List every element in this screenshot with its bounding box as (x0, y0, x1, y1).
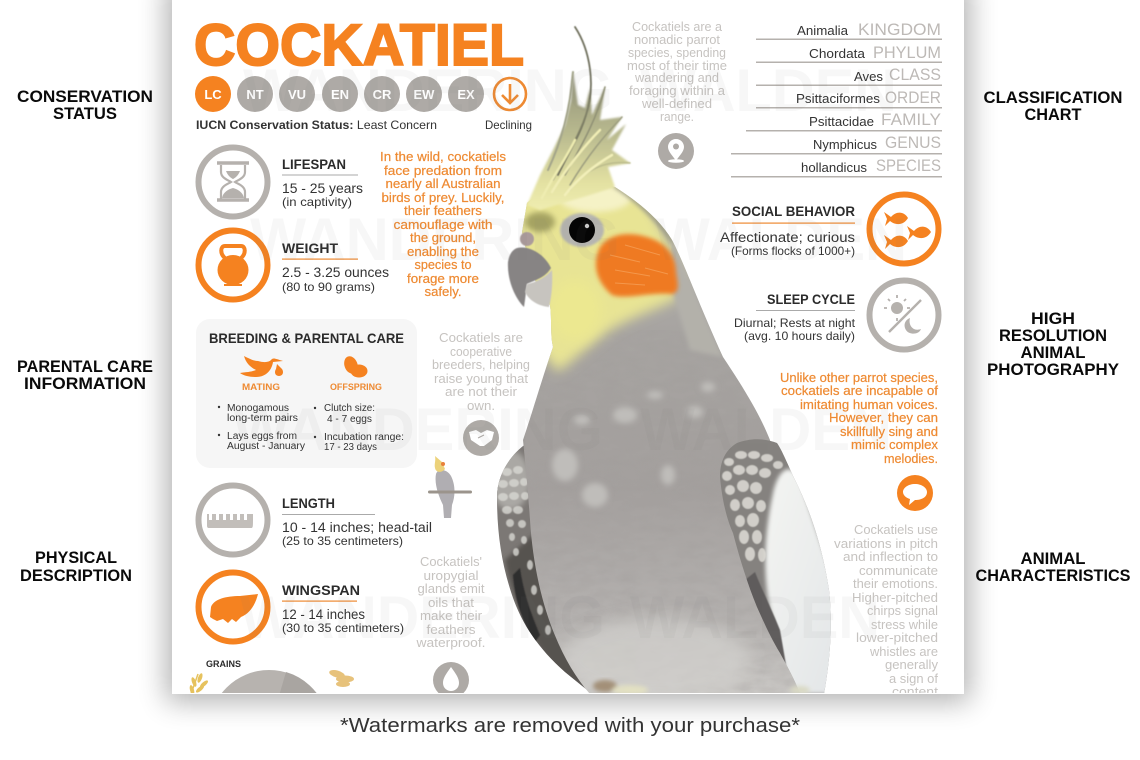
preening fact: uropygial (424, 569, 478, 583)
predation fact: forage more (407, 272, 479, 286)
mating bullets: August - January (227, 441, 305, 452)
weight block: WEIGHT (282, 241, 339, 256)
wingspan block: 12 - 14 inches (282, 607, 365, 622)
weight block: (80 to 90 grams) (282, 280, 375, 294)
vocal communication fact: lower-pitched (856, 631, 938, 645)
watermarks: WALDEN (640, 57, 897, 124)
side label: physical description: DESCRIPTION (20, 567, 132, 585)
predation fact: species to (414, 258, 472, 272)
side label: high resolution animal photography (987, 310, 1119, 379)
lifespan block (198, 148, 363, 216)
conservation status badges: LC (204, 87, 222, 102)
pale crown (559, 184, 631, 212)
vocal communication fact: generally (885, 658, 939, 672)
poster card (172, 0, 964, 694)
side label: parental care information: PARENTAL CARE (17, 358, 153, 376)
watermarks: WANDERING (250, 206, 620, 273)
predation fact: their feathers (404, 204, 482, 218)
icon: hourglass (198, 148, 268, 216)
conservation status badges (195, 76, 484, 112)
sleep cycle block: (avg. 10 hours daily) (744, 329, 855, 343)
panel: breeding and parental care: OFFSPRING (330, 382, 382, 392)
side label: high resolution animal photography: HIGH (1031, 310, 1075, 328)
panel: breeding and parental care (196, 319, 417, 468)
sleep cycle block: SLEEP CYCLE (767, 292, 855, 307)
watermarks: WALDEN (655, 206, 907, 273)
olive lores (525, 212, 555, 232)
card shadow (166, 0, 970, 702)
side label: parental care information: INFORMATION (24, 375, 146, 393)
weight block (198, 230, 389, 300)
conservation status badges: NT (246, 87, 264, 102)
side label: high resolution animal photography: RESOLUTION (999, 327, 1107, 345)
pale face wash (549, 280, 601, 340)
vocal communication fact: whistles are (869, 645, 938, 659)
side label: conservation status: CONSERVATION (17, 88, 153, 106)
social behavior block: SOCIAL BEHAVIOR (732, 204, 855, 219)
cooperative breeders fact: raise young that (434, 372, 529, 386)
icon: fish school (870, 194, 938, 264)
icon: map pin (658, 133, 694, 169)
eye (560, 213, 604, 247)
vocal communication fact: a sign of (889, 672, 939, 686)
pie chart (222, 670, 316, 693)
neck edge grey (672, 240, 723, 357)
crown edge shading (615, 185, 674, 243)
parrot photograph (490, 27, 840, 702)
crest (527, 72, 630, 210)
mating bullets: Lays eggs from (227, 431, 297, 442)
length block: 10 - 14 inches; head-tail (282, 520, 432, 535)
wingspan block: (30 to 35 centimeters) (282, 621, 404, 635)
right wing dark quill (745, 572, 786, 665)
side label: conservation status: STATUS (53, 105, 117, 123)
vocal communication fact: variations in pitch (834, 537, 938, 551)
classification chart: FAMILY (881, 110, 941, 129)
nomadic fact: well-defined (641, 97, 712, 111)
social behavior block (720, 194, 938, 264)
length block (198, 486, 432, 554)
watermarks: WALDEN (630, 584, 880, 651)
icon: eggs (344, 356, 368, 378)
offspring bullets (314, 403, 404, 453)
offspring bullets: Incubation range: (324, 432, 404, 443)
conservation status badges: EN (331, 87, 349, 102)
side label: parental care information (17, 358, 153, 393)
diet chart (190, 660, 354, 693)
preening fact (415, 555, 486, 650)
right wing scallops (722, 451, 783, 562)
watermarks (233, 57, 907, 651)
icon: small bird on perch (428, 456, 472, 518)
icon: wheat (190, 673, 208, 693)
vocal communication fact: stress while (871, 618, 938, 632)
icon: stork (240, 356, 283, 377)
classification chart: Psittaciformes (796, 91, 881, 106)
classification chart: Animalia (797, 23, 849, 38)
preening fact: feathers (426, 623, 476, 637)
icon: speech bubble (897, 475, 933, 511)
icon: kettlebell (198, 230, 268, 300)
feather texture (738, 670, 792, 690)
right wing white panel (765, 469, 840, 694)
mating bullets: long-term pairs (227, 413, 298, 424)
side label: animal characteristics: CHARACTERISTICS (976, 567, 1130, 585)
side label: animal characteristics (976, 550, 1130, 585)
voice mimicry fact: skillfully sing and (840, 425, 938, 439)
predation fact (380, 150, 506, 299)
vocal communication fact: Higher-pitched (852, 591, 938, 605)
nomadic fact (627, 20, 727, 124)
cooperative breeders fact: cooperative (450, 345, 512, 359)
side label: high resolution animal photography: PHOTOGRAPHY (987, 361, 1119, 379)
nomadic fact: wandering and (634, 71, 719, 85)
social behavior block: (Forms flocks of 1000+) (731, 244, 855, 258)
declining label: Declining (485, 118, 532, 132)
predation fact: enabling the (407, 245, 479, 259)
panel: breeding and parental care: BREEDING & PARENTAL CARE (209, 330, 404, 346)
conservation status caption: IUCN Conservation Status: Least Concern (196, 118, 437, 132)
voice mimicry fact: imitating human voices. (800, 398, 938, 412)
lifespan block: LIFESPAN (282, 157, 346, 172)
side label: classification chart: CHART (1024, 106, 1082, 124)
voice mimicry fact: melodies. (884, 452, 938, 466)
cere (520, 232, 534, 246)
cooperative breeders fact: are not their (445, 385, 517, 399)
footer note: *Watermarks are removed with your purchase* (340, 715, 800, 737)
length block: LENGTH (282, 496, 335, 511)
nomadic fact: Cockatiels are a (632, 20, 722, 34)
predation fact: In the wild, cockatiels (380, 150, 506, 164)
crest feathers (542, 27, 630, 198)
title: COCKATIEL (194, 13, 524, 78)
conservation status badges: VU (288, 87, 306, 102)
conservation status badges: CR (373, 87, 392, 102)
side label: physical description (20, 549, 132, 585)
side label: animal characteristics: ANIMAL (1020, 550, 1086, 568)
cooperative breeders fact (432, 331, 530, 413)
classification chart: Nymphicus (813, 137, 877, 152)
vocal communication fact: content (892, 685, 939, 699)
icon: peanuts (329, 670, 354, 687)
cooperative breeders fact: Cockatiels are (439, 331, 523, 345)
length block: (25 to 35 centimeters) (282, 534, 403, 548)
vocal communication fact: Cockatiels use (854, 523, 938, 537)
offspring bullets: 4 - 7 eggs (327, 414, 372, 425)
mating bullets (218, 403, 305, 452)
predation fact: face predation from (384, 164, 502, 178)
poster content (190, 22, 942, 693)
classification chart: CLASS (889, 65, 941, 84)
voice mimicry fact (780, 371, 939, 466)
icon: wing (198, 572, 268, 642)
preening fact: waterproof. (415, 636, 486, 650)
nomadic fact: species, spending (628, 46, 726, 60)
predation fact: birds of prey. Luckily, (382, 191, 504, 205)
voice mimicry fact: Unlike other parrot species, (780, 371, 938, 385)
classification chart: SPECIES (876, 156, 941, 175)
side label: physical description: PHYSICAL (35, 549, 117, 567)
sleep cycle block (734, 280, 938, 350)
preening fact: make their (420, 609, 482, 623)
classification chart: hollandicus (801, 160, 868, 175)
classification chart: ORDER (885, 88, 941, 107)
classification chart: Psittacidae (809, 114, 874, 129)
voice mimicry fact: mimic complex (851, 438, 939, 452)
weight block: 2.5 - 3.25 ounces (282, 265, 389, 280)
vocal communication fact (834, 523, 939, 699)
sleep cycle block: Diurnal; Rests at night (734, 316, 856, 330)
classification chart: Aves (854, 69, 883, 84)
panel: breeding and parental care: MATING (242, 382, 280, 392)
icon: ruler (198, 486, 268, 554)
belly highlight (560, 618, 750, 702)
nomadic fact: range. (660, 110, 694, 124)
lifespan block: (in captivity) (282, 195, 352, 209)
predation fact: the ground, (410, 231, 476, 245)
beak (508, 247, 551, 307)
classification chart: PHYLUM (873, 43, 941, 62)
voice mimicry fact: However, they can (829, 411, 938, 425)
cheek feather highlights (610, 245, 668, 285)
vocal communication fact: communicate (859, 564, 938, 578)
preening fact: oils that (428, 596, 475, 610)
chest spots (552, 382, 715, 507)
voice mimicry fact: cockatiels are incapable of (781, 384, 939, 398)
right wing (715, 435, 840, 695)
preening fact: glands emit (418, 582, 485, 596)
predation fact: nearly all Australian (386, 177, 501, 191)
classification chart: KINGDOM (858, 20, 941, 39)
predation fact: camouflage with (394, 218, 493, 232)
watermarks: WALDEN (640, 396, 892, 463)
wingspan block (198, 572, 404, 642)
icon: declining arrow (494, 78, 526, 110)
beak lower mandible (525, 270, 552, 307)
preening fact: Cockatiels' (420, 555, 482, 569)
social behavior block: Affectionate; curious (720, 230, 855, 245)
vocal communication fact: chirps signal (867, 604, 938, 618)
watermarks: WANDERING (243, 57, 613, 124)
icon: handshake (463, 420, 499, 456)
vocal communication fact: their emotions. (853, 577, 938, 591)
side label: conservation status (17, 88, 153, 123)
icon: water drop (433, 662, 469, 693)
wingspan block: WINGSPAN (282, 583, 360, 598)
side label: classification chart (984, 89, 1122, 124)
nomadic fact: most of their time (627, 59, 727, 73)
watermarks: WANDERING (240, 584, 605, 651)
diet chart: GRAINS (206, 659, 241, 669)
bird body and head silhouette (522, 186, 800, 693)
side label: classification chart: CLASSIFICATION (984, 89, 1122, 107)
classification chart (731, 20, 942, 178)
side label: high resolution animal photography: ANIMAL (1020, 344, 1086, 362)
nomadic fact: nomadic parrot (634, 33, 721, 47)
predation fact: safely. (424, 285, 462, 299)
feet area (593, 680, 810, 695)
offspring bullets: Clutch size: (324, 403, 375, 414)
watermarks: WANDERING (233, 396, 603, 463)
conservation status badges: EW (414, 87, 435, 102)
classification chart: Chordata (809, 46, 866, 61)
orange cheek (596, 234, 678, 297)
cooperative breeders fact: breeders, helping (432, 358, 530, 372)
classification chart: GENUS (885, 133, 941, 152)
conservation status badges: EX (457, 87, 475, 102)
icon: sun and moon (870, 280, 938, 350)
yellow head patch (515, 185, 682, 372)
vocal communication fact: and inflection to (843, 550, 938, 564)
lifespan block: 15 - 25 years (282, 181, 363, 196)
mating bullets: Monogamous (227, 403, 289, 414)
offspring bullets: 17 - 23 days (324, 442, 377, 453)
left wing (497, 446, 586, 689)
cooperative breeders fact: own. (467, 399, 495, 413)
nomadic fact: foraging within a (629, 84, 725, 98)
